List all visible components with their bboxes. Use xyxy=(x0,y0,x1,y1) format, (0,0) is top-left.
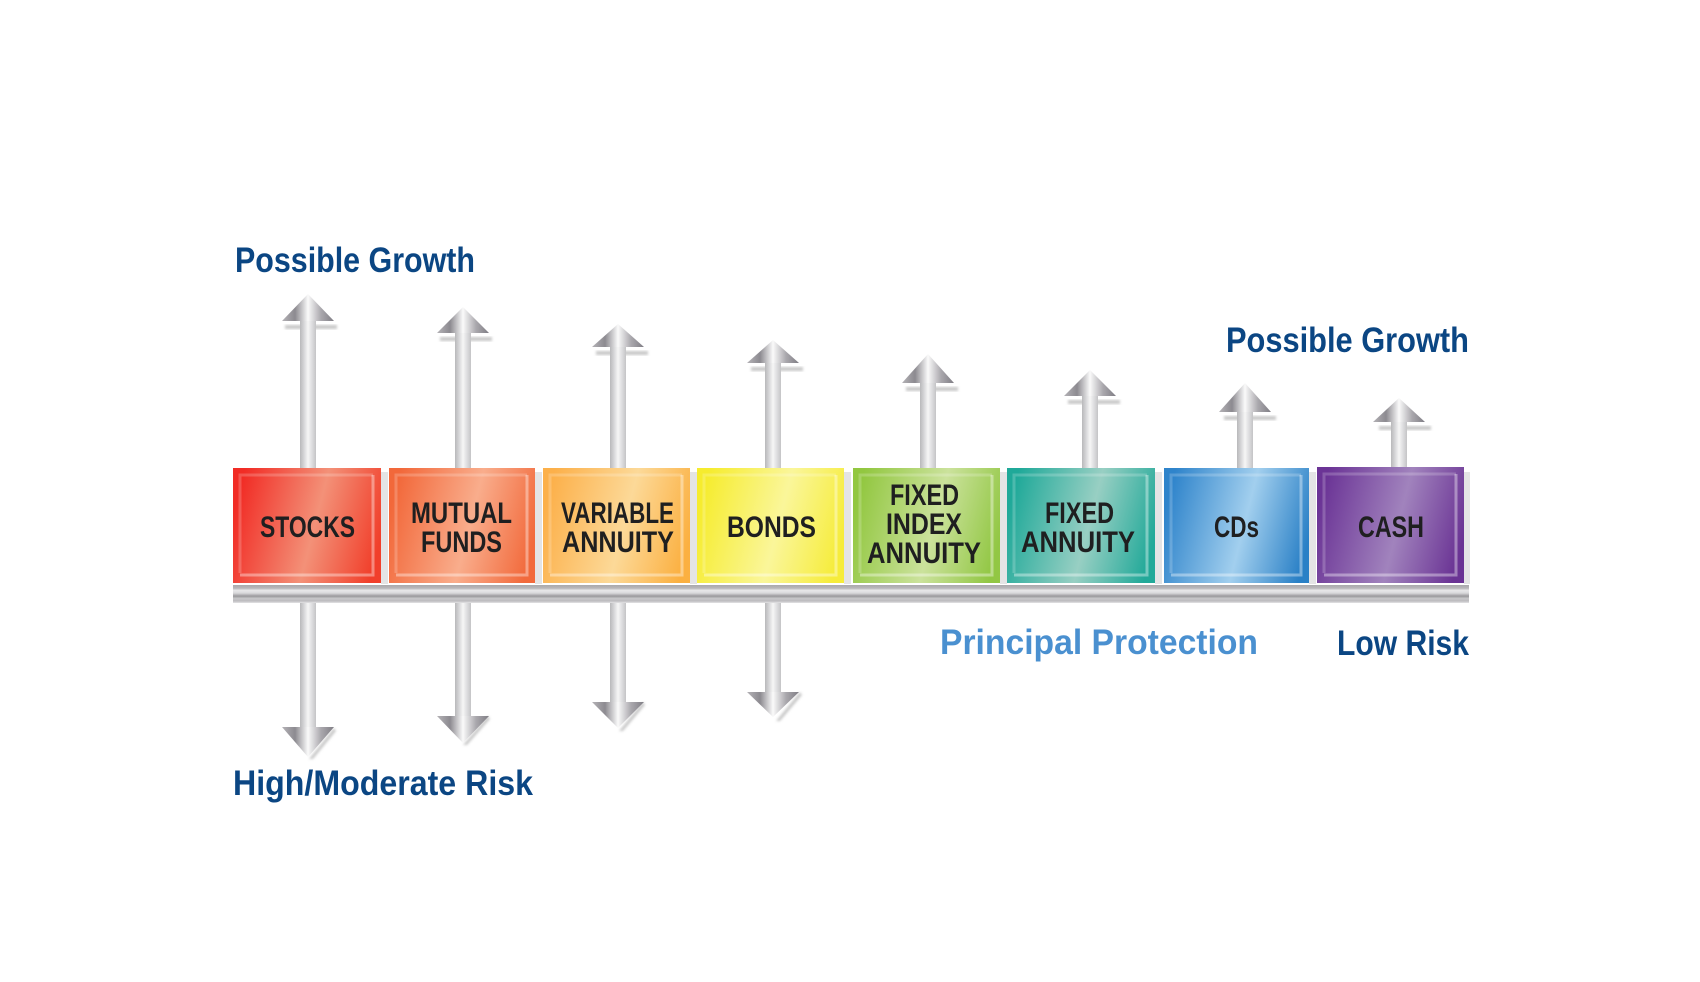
panel: bonds xyxy=(697,468,851,584)
label: low risk: Low Risk xyxy=(1337,624,1469,663)
arrow: fixed annuity up xyxy=(1064,370,1120,468)
panel: fixed annuity xyxy=(1007,468,1162,584)
panel: variable annuity: VARIABLE xyxy=(561,497,674,530)
heading: possible growth right: Possible Growth xyxy=(1226,321,1469,360)
arrow: bonds up xyxy=(747,340,803,468)
arrow: bonds down xyxy=(747,603,802,721)
panel: stocks: STOCKS xyxy=(260,511,355,544)
panel: cash xyxy=(1317,467,1470,584)
arrow: variable annuity up xyxy=(592,324,648,468)
panel: cash: CASH xyxy=(1358,511,1424,544)
arrow: mutual funds down xyxy=(437,603,490,745)
arrow: mutual funds up xyxy=(437,307,492,468)
baseline bar xyxy=(233,585,1469,603)
panel: cds xyxy=(1164,468,1316,584)
label: high moderate risk: High/Moderate Risk xyxy=(233,764,533,803)
panel: variable annuity xyxy=(543,468,697,584)
panel: variable annuity: ANNUITY xyxy=(562,526,674,559)
panel: mutual funds: MUTUAL xyxy=(411,497,512,530)
panel: fixed index annuity: ANNUITY xyxy=(867,537,981,570)
panel: fixed index annuity xyxy=(853,468,1007,584)
arrow: fixed index annuity up xyxy=(902,354,958,468)
panel: cds: CDs xyxy=(1214,511,1259,544)
panel: mutual funds: FUNDS xyxy=(421,526,502,559)
panel: stocks xyxy=(233,468,388,584)
panel: bonds: BONDS xyxy=(727,511,816,544)
heading: possible growth left: Possible Growth xyxy=(235,241,475,280)
arrow: cds up xyxy=(1219,383,1276,468)
panel: fixed annuity: FIXED xyxy=(1045,497,1114,530)
panel: fixed index annuity: FIXED xyxy=(890,479,959,512)
arrow: stocks up xyxy=(282,294,337,468)
arrow: variable annuity down xyxy=(592,603,645,731)
panel: fixed annuity: ANNUITY xyxy=(1021,526,1135,559)
panel: mutual funds xyxy=(389,468,542,584)
arrow: stocks down xyxy=(282,603,336,759)
label: principal protection: Principal Protection xyxy=(940,623,1258,662)
panel: fixed index annuity: INDEX xyxy=(886,508,962,541)
arrow: cash up xyxy=(1373,398,1431,468)
